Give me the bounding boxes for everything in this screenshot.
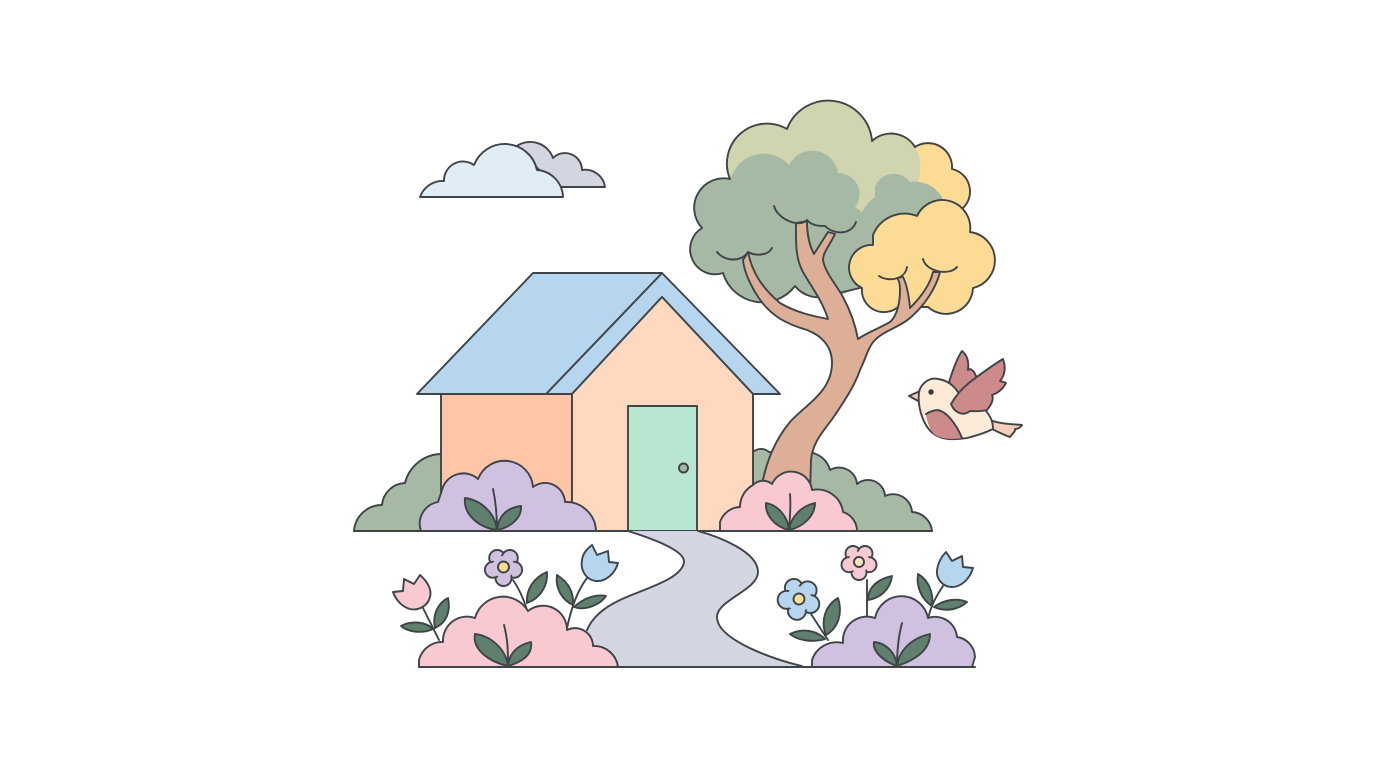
back yellow foliage <box>915 143 970 215</box>
house <box>417 273 780 531</box>
icon: pink tulip <box>393 575 449 640</box>
icon: lilac flower <box>485 550 547 610</box>
icon: blue tulip <box>557 545 618 628</box>
icon: pink flower <box>842 546 892 618</box>
path <box>580 531 802 667</box>
back sage foliage <box>727 101 920 215</box>
left flowers <box>393 545 618 640</box>
branch canopy arcs <box>717 206 957 279</box>
left roof <box>417 273 662 394</box>
path right edge <box>698 531 802 666</box>
ground line lower <box>419 666 975 668</box>
icon: left background shrub <box>354 454 442 531</box>
door knob <box>679 464 688 472</box>
bird tail <box>990 420 1022 437</box>
icon: blue tulip right <box>918 552 973 618</box>
bird body <box>919 379 993 439</box>
right flowers <box>775 546 973 641</box>
icon: pink garden bush <box>419 597 618 667</box>
icon: blue flower <box>775 577 840 641</box>
front wall <box>572 297 753 531</box>
bird front wing <box>951 359 1006 414</box>
mid green foliage <box>690 151 942 302</box>
bird beak <box>909 391 920 402</box>
bird back wing <box>949 351 977 394</box>
trunk and branches <box>743 221 940 495</box>
icon: lilac bush by house <box>420 461 596 531</box>
icon: pink bush by house <box>720 472 857 531</box>
icon: lilac garden bush <box>812 596 975 667</box>
side wall <box>441 394 572 531</box>
path left edge <box>587 531 684 630</box>
icon: right background shrub <box>753 449 932 531</box>
icon: clouds <box>420 142 605 197</box>
bird eye <box>928 389 934 395</box>
ground line <box>354 530 932 532</box>
front yellow foliage <box>849 200 995 314</box>
door <box>628 406 697 531</box>
tree <box>690 101 995 495</box>
icon: bird <box>909 351 1022 439</box>
right roof strip <box>546 273 780 394</box>
bird belly patch <box>926 410 962 439</box>
